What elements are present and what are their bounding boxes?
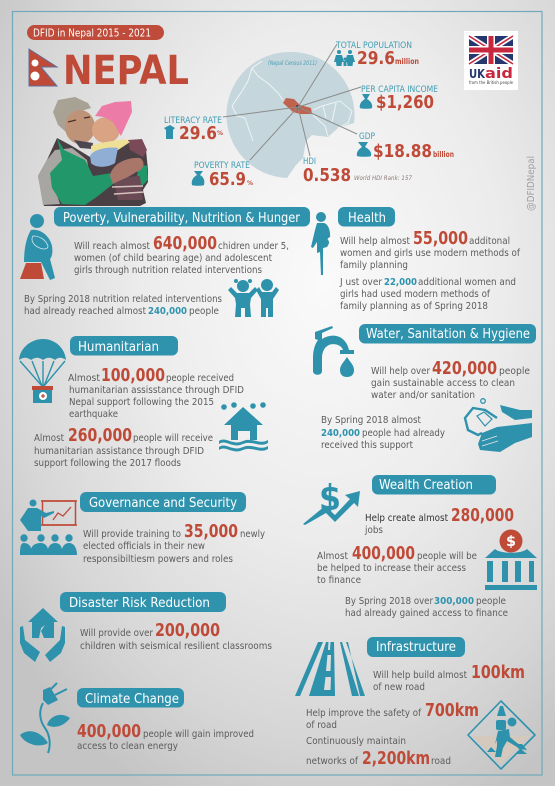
logo: UK aid: from the British people — [469, 80, 514, 85]
stat: literacy rate: % — [217, 130, 223, 137]
icon: bank: $ — [506, 534, 516, 550]
text: 22,000 reached: family planning as of Spring 2018 — [340, 301, 488, 312]
icon: two children — [228, 279, 279, 317]
icon: washing hands — [465, 399, 532, 452]
stat: poverty rate: 65.9 — [209, 169, 246, 190]
text: 100km new road — [373, 662, 525, 693]
text: 200,000 children — [80, 620, 272, 652]
stat: poverty rate — [192, 161, 253, 190]
panel: water, sanitation and hygiene — [313, 324, 536, 452]
text: 280,000 jobs — [364, 505, 514, 536]
text: 2,200km maintenance — [306, 736, 451, 769]
panel: poverty, vulnerability, nutrition and hunger — [20, 207, 310, 317]
text: 640,000 target: women (of child bearing age) and adolescent — [74, 253, 272, 264]
icon: parachute with aid box — [19, 339, 66, 403]
text: 2,200km maintenance: 2,200km — [362, 748, 430, 769]
text: 22,000 reached: additional women and — [418, 277, 516, 288]
text: 240,000 reached: 240,000 — [148, 306, 187, 317]
stat: total population: TOTAL POPULATION — [335, 41, 412, 51]
icon: road — [295, 642, 365, 696]
text: 240,000 reached: people — [189, 306, 219, 317]
text: 240,000 reached: By Spring 2018 almost — [321, 415, 421, 426]
text: 260,000 floods: 260,000 — [68, 425, 132, 446]
icon: bank — [485, 530, 537, 590]
text: 640,000 target: 640,000 — [153, 233, 217, 254]
panel: disaster risk reduction — [20, 592, 272, 662]
heading: Water, Sanitation & Hygiene — [366, 327, 530, 342]
header pill: DFID in Nepal 2015 - 2021: DFID in Nepal 2015 - 2021 — [33, 28, 151, 40]
stat: HDI: 0.538 — [303, 165, 351, 186]
text: 240,000 reached — [321, 415, 445, 451]
icon: hands holding house — [20, 608, 65, 662]
stat: literacy rate — [164, 116, 223, 144]
text: 240,000 reached: people had already — [362, 428, 445, 439]
icon: dollar with rising arrow — [303, 478, 360, 525]
heading: Governance and Security — [89, 496, 237, 511]
text: 640,000 target: chidren under 5, — [218, 241, 289, 252]
text: 400,000 finance: be helped to increase their access — [317, 563, 466, 574]
text: 35,000 officials: 35,000 — [184, 521, 238, 542]
text: 400,000 clean energy: 400,000 — [77, 721, 141, 742]
handle: @DFIDNepal: @DFIDNepal — [526, 156, 537, 211]
text: 2,200km maintenance: road — [431, 756, 451, 767]
text: 260,000 floods: people will receive — [133, 433, 213, 444]
text: 100,000 earthquake: 100,000 — [101, 365, 165, 386]
text: 240,000 reached: By Spring 2018 nutrition related interventions — [24, 294, 222, 305]
text: 640,000 target — [74, 233, 289, 276]
text: 35,000 officials: newly — [240, 529, 265, 540]
text: 280,000 jobs: Help create almost — [365, 513, 448, 524]
heading: Climate Change — [85, 692, 179, 707]
heading: Infrastructure — [376, 640, 456, 655]
stat: per capita income: PER CAPITA INCOME — [361, 85, 438, 95]
text: 35,000 officials: elected officials in their new — [83, 541, 205, 552]
logo: UK aid: aid — [485, 66, 513, 82]
heading — [54, 207, 310, 226]
text: 55,000 target: additonal — [469, 236, 510, 247]
text: 260,000 floods: support following the 2017 floods — [34, 458, 181, 469]
heading — [367, 637, 465, 657]
map of South Asia with Nepal highlighted — [223, 44, 361, 178]
text: 100,000 earthquake: people received — [166, 373, 234, 384]
text: 100km new road: 100km — [471, 662, 525, 683]
stat: HDI — [303, 157, 412, 186]
photo: mother and child — [38, 97, 148, 206]
text: 400,000 finance: people will be — [417, 551, 477, 562]
heading: Humanitarian — [78, 340, 159, 355]
heading: Poverty, Vulnerability, Nutrition & Hunger — [63, 211, 301, 226]
text: 260,000 floods: humanitarian assistance through DFID — [34, 446, 204, 457]
panel: humanitarian — [19, 336, 268, 469]
icon: presenter with audience — [20, 500, 77, 555]
text: 240,000 reached: received this support — [321, 440, 413, 451]
icon: dollar with rising arrow: $ — [319, 478, 341, 519]
panel: climate change — [20, 683, 254, 753]
stat: GDP: $18.88 — [373, 141, 432, 162]
text: 300,000 reached: had already gained access to finance — [345, 608, 508, 619]
icon: money bag — [192, 171, 204, 186]
text: 100km new road: Will help build almost — [373, 670, 467, 681]
text: 260,000 floods: Almost — [34, 433, 64, 444]
text: 100,000 earthquake: earthquake — [69, 409, 118, 420]
text: 300,000 reached: people — [476, 596, 506, 607]
text: 35,000 officials: Will provide training to — [83, 529, 181, 540]
text: 700km road safety: Help improve the safety of — [306, 708, 421, 719]
text: 55,000 target: Will help almost — [340, 236, 410, 247]
stat: literacy rate: 29.6 — [179, 123, 217, 144]
text: 2,200km maintenance: networks of — [306, 756, 358, 767]
text: 640,000 target: girls through nutrition related interventions — [74, 265, 262, 276]
heading: Health — [348, 211, 386, 226]
stat: GDP — [357, 132, 454, 162]
logo: UK aid: UK — [469, 66, 486, 81]
text: 200,000 children: Will provide over — [80, 628, 154, 639]
icon: plug plant — [20, 683, 70, 753]
icon: pregnant woman — [311, 212, 334, 275]
text: 260,000 floods — [34, 425, 213, 469]
icon: Nepal flag — [29, 49, 57, 86]
heading — [60, 592, 226, 612]
panel: health — [311, 207, 520, 312]
text: 55,000 target: women and girls use modern methods of — [340, 248, 520, 259]
logo: UK aid — [464, 31, 518, 90]
icon: tap with drop — [313, 326, 354, 377]
text: 420,000 target: 420,000 — [432, 358, 497, 379]
text: 400,000 clean energy: people will gain improved — [143, 729, 254, 740]
panel: infrastructure — [295, 637, 535, 769]
text: 240,000 reached — [24, 294, 222, 317]
panel: governance and security — [20, 492, 265, 565]
stat: poverty rate: POVERTY RATE — [194, 161, 250, 171]
text: 240,000 reached: 240,000 — [321, 428, 360, 439]
text: 420,000 target: people — [499, 366, 530, 377]
text: 22,000 reached — [339, 277, 516, 312]
stat: total population — [334, 41, 419, 69]
text: 100,000 earthquake — [68, 365, 244, 420]
text: 22,000 reached: girls had used modern methods of — [340, 289, 490, 300]
text: 400,000 finance: 400,000 — [352, 543, 415, 564]
icon: family — [334, 50, 355, 66]
heading — [80, 492, 246, 512]
heading — [338, 207, 395, 226]
text: 280,000 jobs: jobs — [364, 525, 383, 536]
text: 22,000 reached: 22,000 — [384, 277, 417, 288]
text: 300,000 reached: By Spring 2018 over — [345, 596, 434, 607]
stat: total population: million — [395, 57, 419, 66]
text: 100,000 earthquake: Almost — [68, 373, 100, 384]
text: 300,000 reached — [345, 596, 508, 619]
text: 35,000 officials: responsibiltiesm powers and roles — [83, 554, 233, 565]
icon: money bag — [357, 142, 371, 157]
text: 300,000 reached: 300,000 — [434, 596, 474, 607]
text: 700km road safety: of road — [306, 720, 337, 731]
heading — [70, 336, 178, 356]
heading: Wealth Creation — [379, 478, 473, 493]
text: 200,000 children: 200,000 — [155, 620, 220, 641]
icon: road works sign — [468, 701, 535, 769]
text: 400,000 clean energy — [77, 721, 254, 752]
heading — [372, 475, 496, 494]
text: 700km road safety — [306, 700, 479, 731]
stat: HDI: HDI — [303, 157, 316, 167]
text: 22,000 reached: J ust over — [339, 277, 383, 288]
icon: seated pregnant woman — [20, 214, 55, 280]
text: 420,000 target: Will help over — [371, 366, 431, 377]
text: 280,000 jobs: 280,000 — [451, 505, 514, 526]
text: 55,000 target: family planning — [340, 260, 408, 271]
text: 100,000 earthquake: humanitarian assisstance through DFID — [69, 385, 244, 396]
stat: literacy rate: LITERACY RATE — [164, 116, 222, 126]
text: 2,200km maintenance: Continuously maintain — [306, 736, 406, 747]
text: 420,000 target: gain sustainable access to clean — [371, 378, 515, 389]
icon: graduate — [164, 125, 175, 139]
text: 400,000 clean energy: access to clean energy — [77, 741, 178, 752]
text: 100km new road: of new road — [373, 682, 425, 693]
stat: per capita income — [360, 85, 438, 113]
text: 400,000 finance: to finance — [317, 575, 361, 586]
icon: flooded house — [219, 402, 268, 451]
text: 35,000 officials — [83, 521, 265, 565]
text: 420,000 target: water and/or sanitation — [371, 390, 475, 401]
stat: poverty rate: % — [247, 180, 253, 187]
map of South Asia with Nepal highlighted: (Nepal Census 2011) — [268, 60, 317, 67]
stat: per capita income: $1,260 — [376, 92, 434, 113]
text: 55,000 target: 55,000 — [413, 228, 468, 249]
text: 55,000 target — [340, 228, 520, 271]
panel: wealth creation — [303, 475, 537, 619]
stat: total population: 29.6 — [357, 48, 395, 69]
icon: money bag — [360, 94, 372, 109]
text: 420,000 target — [371, 358, 530, 401]
text: 100,000 earthquake: Nepal support following the 2015 — [69, 397, 214, 408]
stat: GDP: billion — [433, 150, 454, 159]
text: 400,000 finance: Almost — [317, 551, 348, 562]
title: NEPAL: NEPAL — [63, 48, 189, 94]
heading: Disaster Risk Reduction — [69, 596, 210, 611]
text: 200,000 children: children with seismical resilient classrooms — [80, 641, 272, 652]
text: 240,000 reached: had already reached almost — [24, 306, 146, 317]
heading — [77, 688, 184, 708]
text: 400,000 finance — [317, 543, 477, 586]
text: 700km road safety: 700km — [425, 700, 479, 721]
text: 640,000 target: Will reach almost — [74, 241, 150, 252]
stat: GDP: GDP — [359, 132, 375, 142]
heading — [359, 324, 536, 344]
stat: HDI: World HDI Rank: 157 — [354, 175, 412, 182]
